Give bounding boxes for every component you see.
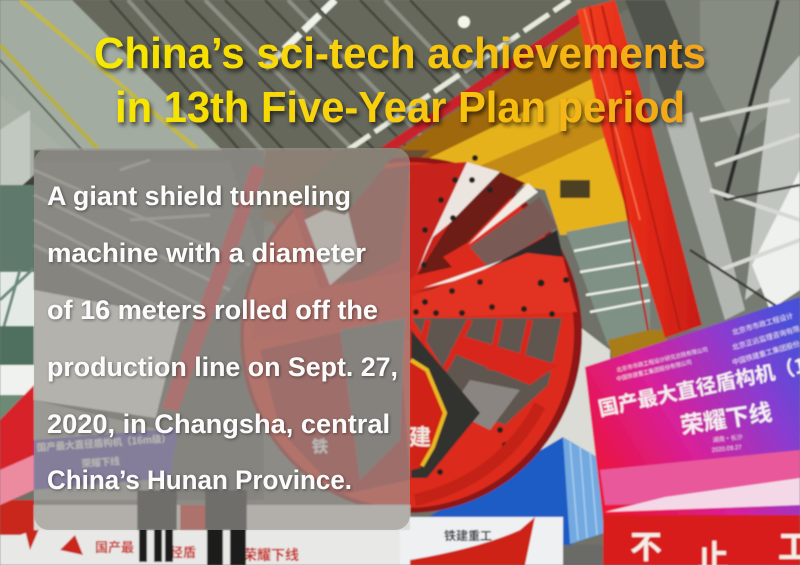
purple sign behind panel: [34, 428, 410, 530]
large display banner: 荣耀下线: [678, 393, 774, 441]
large display banner: 北京市市政工程设计研究总院有限公司: [616, 345, 709, 374]
body text: [47, 181, 398, 495]
large display banner: 北京正远监理咨询有限: [731, 324, 800, 353]
crane girder and LED strip: [262, 5, 645, 235]
body text: 2020, in Changsha, central: [47, 409, 390, 439]
body text: of 16 meters rolled off the: [47, 295, 378, 325]
people standing on stage: [139, 530, 246, 565]
inner hall ceiling grid: [566, 218, 668, 358]
floor and booth along the bottom: 荣耀下线: [243, 545, 299, 565]
shield machine cutter head: 建: [409, 420, 431, 452]
purple sign behind panel: 铁: [312, 433, 328, 457]
title: in 13th Five-Year Plan period: [115, 83, 685, 132]
floor and booth along the bottom: [0, 385, 603, 565]
large display banner: 北京市市政工程设计: [731, 311, 794, 338]
large display banner: 2020.09.27: [712, 445, 743, 454]
shield machine cutter head: [222, 140, 600, 530]
floor and booth along the bottom: 径盾: [170, 542, 196, 561]
purple sign behind panel: 荣耀下线: [81, 453, 121, 470]
floor and booth along the bottom: 铁建重工: [444, 527, 492, 544]
floor and booth along the bottom: 国产最: [95, 537, 134, 556]
body text: A giant shield tunneling: [47, 181, 351, 211]
translucent text panel: [34, 148, 410, 530]
mid left hall wall and windows: [0, 150, 264, 500]
white wall below machine right side: [500, 300, 610, 470]
large display banner: 中国铁建重工集团股份有限公司: [616, 358, 692, 383]
purple sign behind panel: 国产最大直径盾构机（16m级）: [36, 431, 171, 454]
cutter head part behind panel: [290, 180, 410, 300]
red base with white characters: [603, 515, 800, 565]
red ceremonial curtain: [577, 0, 702, 338]
steel panels at upper left: [0, 0, 232, 290]
body text: production line on Sept. 27,: [47, 352, 398, 382]
large display banner: 中国铁建重工集团股份: [731, 339, 800, 368]
right side steel frame: [625, 0, 800, 330]
blue pedestal: [430, 437, 604, 545]
ceiling: [70, 0, 640, 230]
body text: machine with a diameter: [47, 238, 366, 268]
large display banner: 湖南·长沙: [712, 432, 743, 444]
large display banner: [585, 297, 800, 517]
body text: China’s Hunan Province.: [47, 465, 352, 495]
title: China’s sci-tech achievements: [94, 29, 706, 78]
title: [94, 29, 706, 132]
red strap behind panel: [162, 165, 266, 412]
